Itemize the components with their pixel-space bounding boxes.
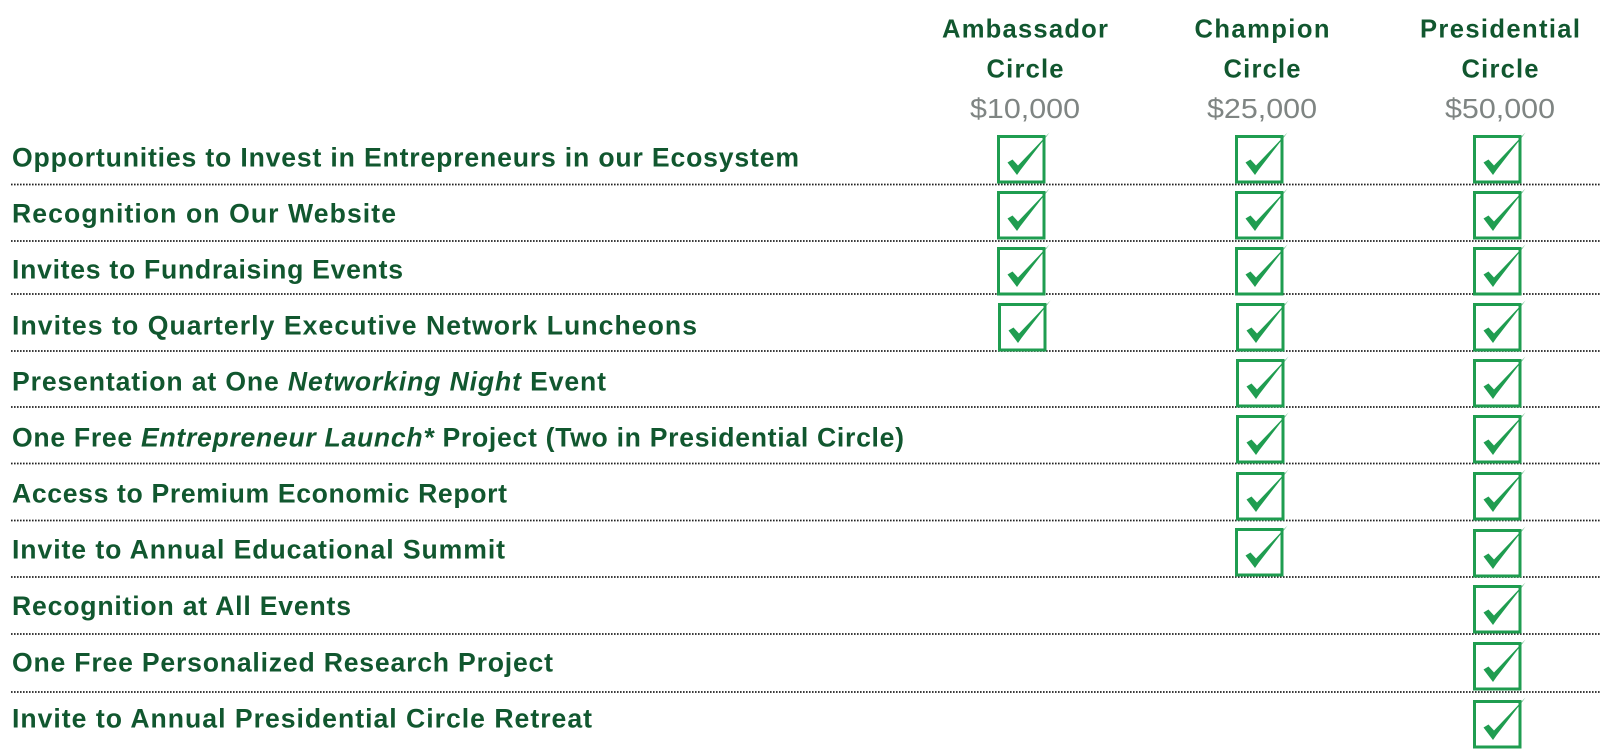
row label: Invite to Annual Educational Summit: Invite to Annual Educational Summit <box>12 534 505 564</box>
column header: Presidential Circle: Circle <box>1462 56 1538 84</box>
column header: Ambassador Circle <box>942 16 1108 124</box>
row label: Invites to Quarterly Executive Network Luncheons: Invites to Quarterly Executive Network Luncheons <box>12 310 697 340</box>
column header: Ambassador Circle: Ambassador <box>942 16 1108 44</box>
row label: Invites to Fundraising Events: Invites to Fundraising Events <box>12 254 403 284</box>
column header: Champion Circle: Circle <box>1224 56 1300 84</box>
checkmarks: Presidential column <box>1474 132 1526 747</box>
column header: Presidential Circle <box>1420 16 1580 124</box>
column header: Presidential Circle: Presidential <box>1420 16 1580 44</box>
checkmarks: Ambassador column <box>998 132 1050 350</box>
row label: Presentation at One Networking Night Event: Presentation at One Networking Night Event <box>12 366 606 396</box>
column header: Champion Circle: $25,000 <box>1207 93 1317 124</box>
row label: One Free Personalized Research Project: One Free Personalized Research Project <box>12 648 553 678</box>
row label: One Free Entrepreneur Launch Project: One Free Entrepreneur Launch* Project (Two in Presidential Circle) <box>12 422 904 452</box>
column header: Champion Circle: Champion <box>1194 16 1330 44</box>
row label: Access to Premium Economic Report: Access to Premium Economic Report <box>12 478 507 508</box>
checkmarks: Champion column <box>1236 132 1288 575</box>
column header: Champion Circle <box>1194 16 1330 124</box>
row label: Invite to Annual Presidential Circle Retreat: Invite to Annual Presidential Circle Retreat <box>12 704 592 734</box>
row label: Recognition on Our Website: Recognition on Our Website <box>12 198 396 228</box>
column header: Ambassador Circle: $10,000 <box>970 93 1080 124</box>
row label: Recognition at All Events: Recognition at All Events <box>12 591 351 621</box>
column header: Presidential Circle: $50,000 <box>1445 93 1555 124</box>
column header: Ambassador Circle: Circle <box>986 56 1064 84</box>
row label: Opportunities to Invest: Opportunities to Invest in Entrepreneurs in our Ecosystem <box>12 142 799 172</box>
